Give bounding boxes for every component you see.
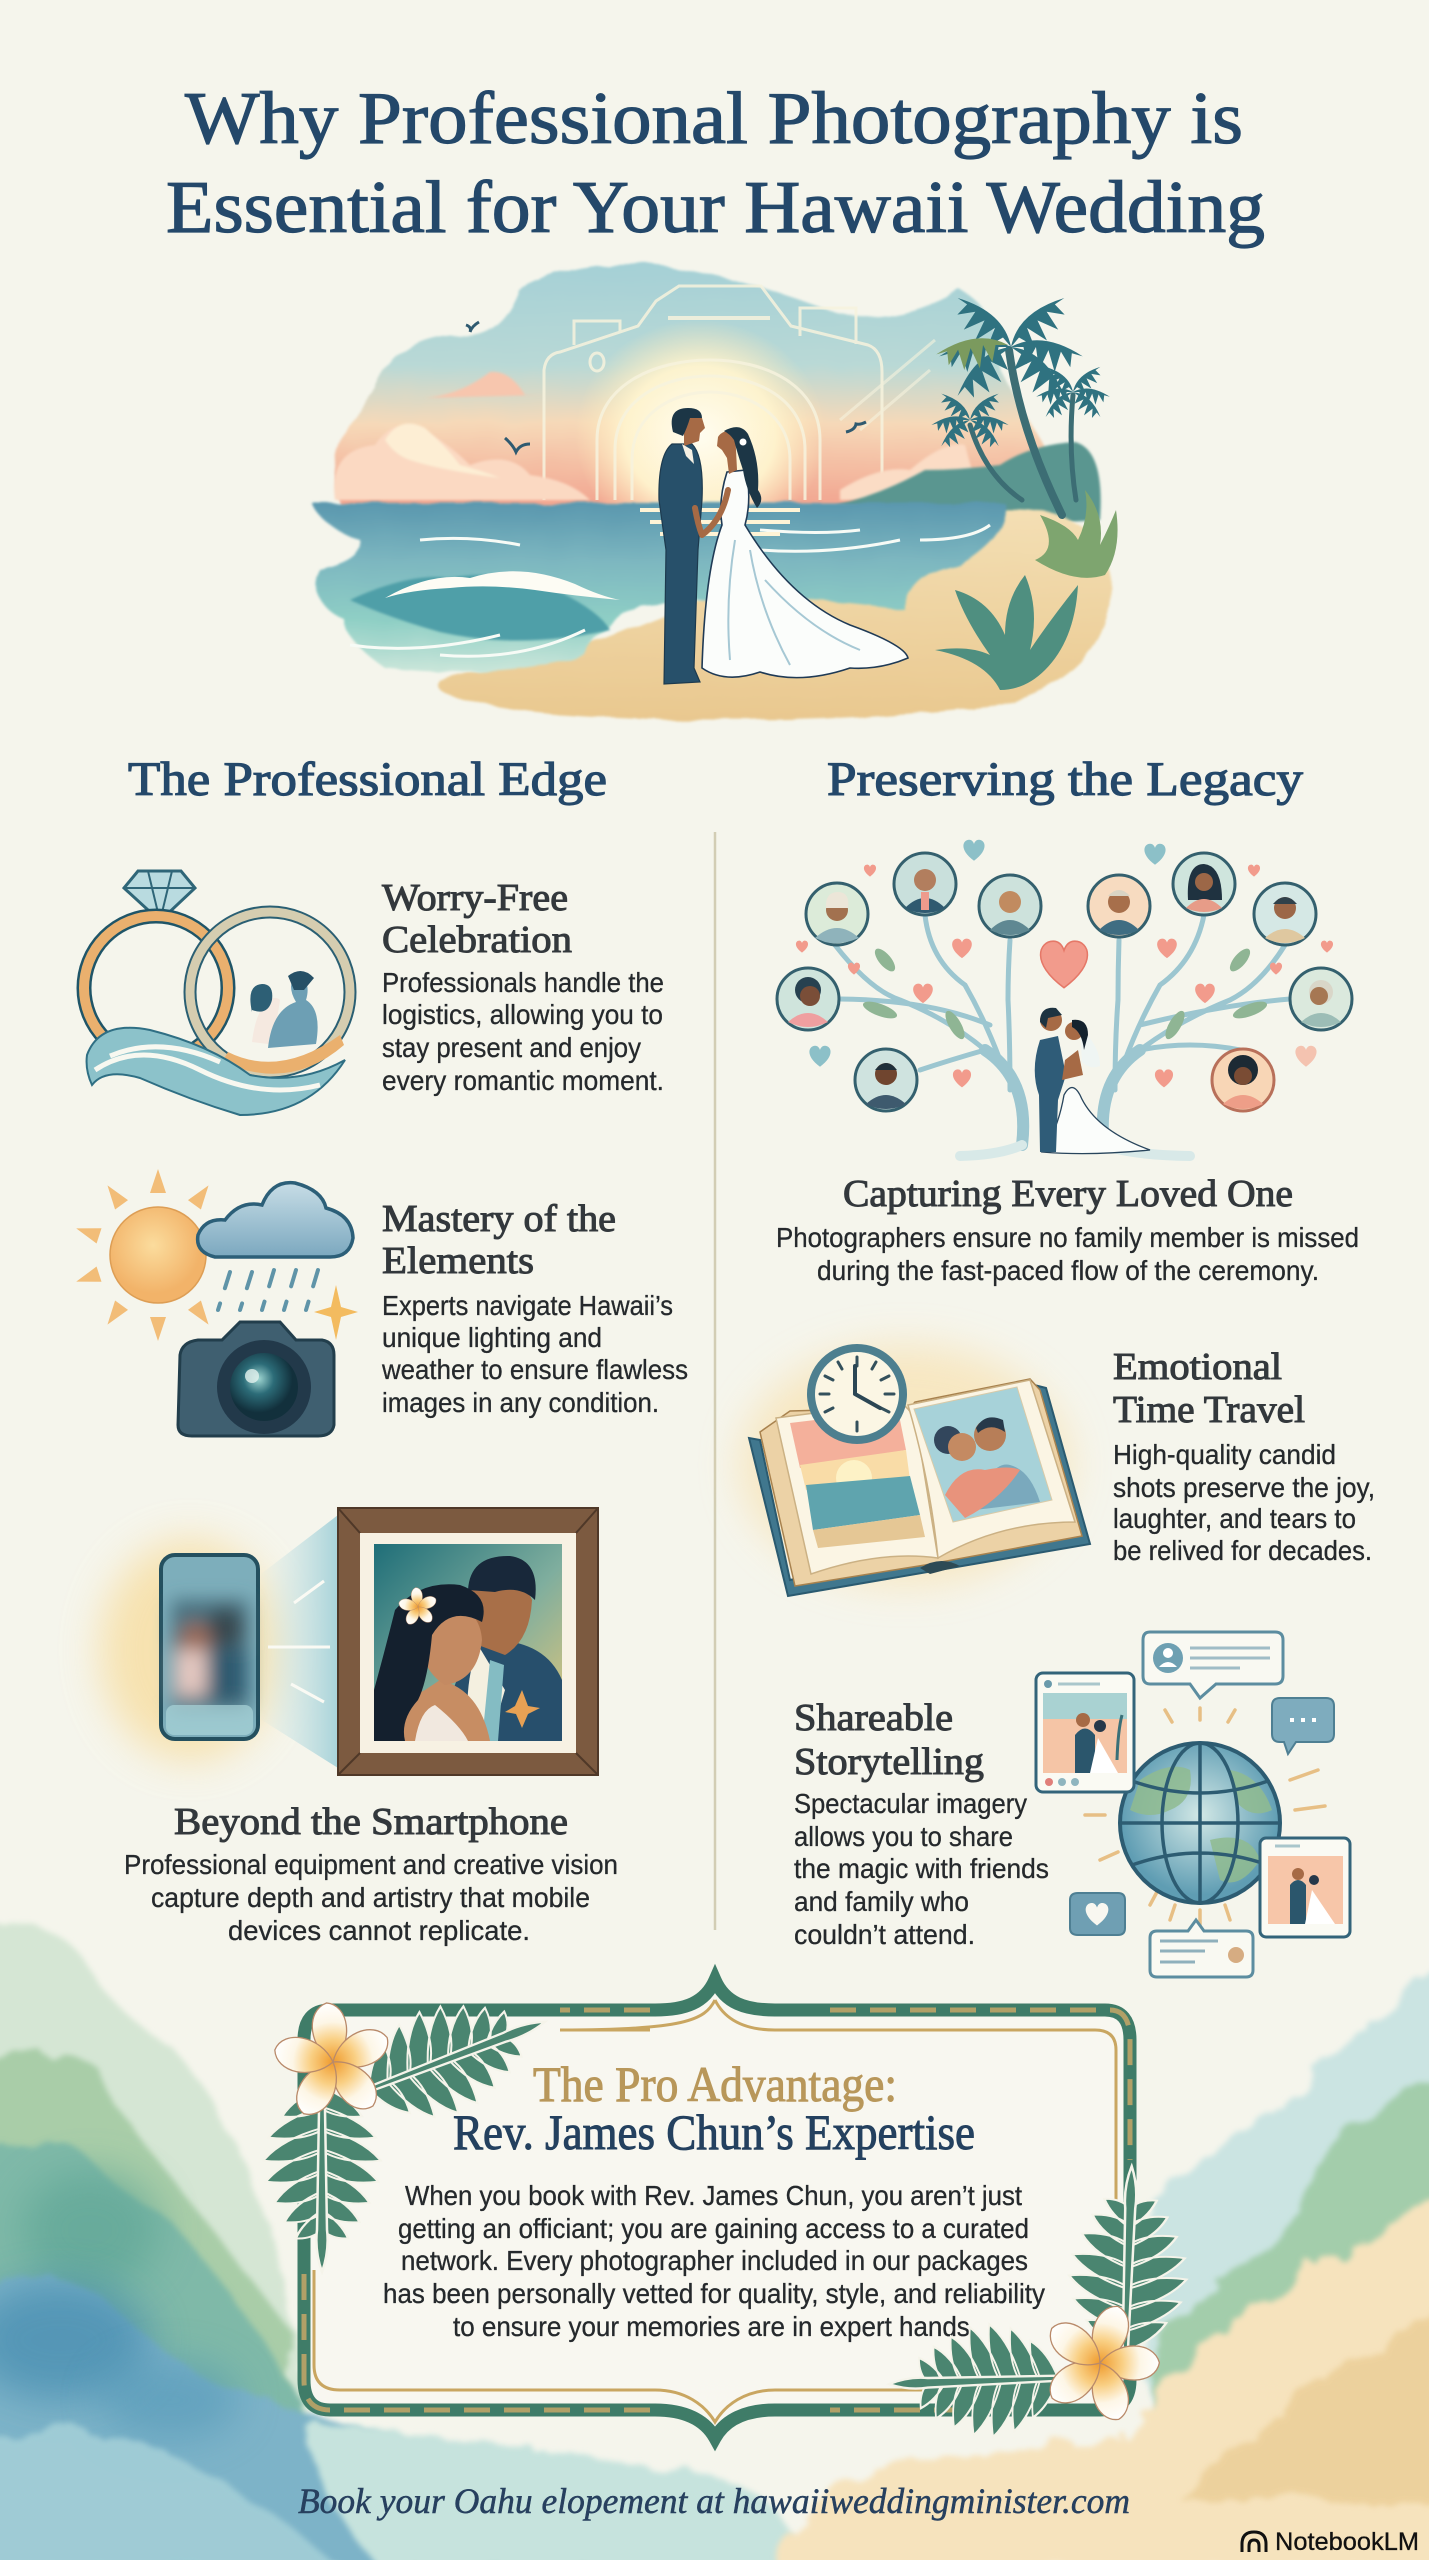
left pale blue wash: [300, 2420, 800, 2560]
heading: Time Travel: [1113, 1389, 1305, 1431]
icon: projection beam: [257, 1515, 338, 1768]
wave: [350, 575, 610, 641]
text block: Photographers ensure no family member is missed: [776, 1222, 1359, 1253]
panel: beyond the smartphone: [100, 1508, 618, 1946]
text block: laughter, and tears to: [1113, 1503, 1356, 1534]
panel: capturing every loved one: [776, 840, 1359, 1286]
birds: [466, 322, 866, 452]
text block: and family who: [794, 1886, 969, 1917]
panel: mastery of the elements: [74, 1169, 688, 1436]
social post: couple: [1036, 1673, 1134, 1792]
icon: family tree with portraits: [777, 840, 1352, 1156]
clouds: [334, 372, 980, 500]
text block: Experts navigate Hawaii’s: [382, 1290, 673, 1321]
bottom post bubble: [1150, 1920, 1253, 1977]
text block: Professional equipment and creative vision: [124, 1849, 618, 1880]
icon: phone glow: [100, 1540, 280, 1760]
palm trees: [931, 288, 1110, 515]
speech bubble: profile: [1143, 1632, 1283, 1698]
text block: the magic with friends: [794, 1853, 1049, 1884]
icon: portrait medallions: [777, 853, 1352, 1111]
text block: devices cannot replicate.: [228, 1915, 530, 1946]
footer call to action: Book your Oahu elopement at hawaiiweddingminister.com: [298, 2481, 1130, 2521]
icon: sun, cloud and camera: [74, 1169, 358, 1436]
notebooklm badge: NotebookLM: [1275, 2528, 1419, 2556]
beach foliage: [935, 490, 1118, 690]
left teal blotch: [20, 2170, 160, 2290]
text block: logistics, allowing you to: [382, 999, 663, 1030]
decorative frame: [304, 1980, 1130, 2438]
heading: Shareable: [794, 1697, 953, 1739]
heading: gold: The Pro Advantage:: [533, 2056, 897, 2112]
heading: [382, 877, 572, 961]
text block: Spectacular imagery: [794, 1788, 1027, 1819]
watercolor landscape background: [0, 1926, 1429, 2560]
heading: Beyond the Smartphone: [174, 1801, 568, 1843]
icon: clock: [811, 1348, 903, 1440]
groom: [659, 408, 705, 684]
icon: palm fronds: [263, 1971, 1190, 2441]
text block: High-quality candid: [1113, 1439, 1336, 1470]
left deep blue blotches: [0, 2280, 150, 2400]
text block: [381, 1290, 688, 1418]
right pale blue hills: [1150, 1970, 1429, 2440]
panel: emotional time travel: [740, 1345, 1375, 1596]
icon: rings and wave: [84, 871, 350, 1115]
callout: the pro advantage: [263, 1971, 1190, 2442]
sand: [438, 510, 1111, 721]
text block: stay present and enjoy: [382, 1032, 641, 1063]
icon: open photo album: [749, 1379, 1090, 1596]
icon: notebooklm mark: [1242, 2532, 1266, 2552]
heading: Mastery of the: [382, 1198, 616, 1240]
left blue water: [0, 2277, 620, 2560]
text block: Professionals handle the: [382, 967, 664, 998]
text block: couldn’t attend.: [794, 1919, 975, 1950]
heading: [1113, 1346, 1305, 1431]
text block: during the fast-paced flow of the ceremony.: [817, 1255, 1319, 1286]
distant island: [835, 442, 1101, 525]
title: Why Professional Photography is: [185, 78, 1243, 160]
center divider: [714, 832, 716, 1930]
text block: unique lighting and: [382, 1322, 602, 1353]
text block: [794, 1788, 1049, 1950]
text block: to ensure your memories are in expert hands.: [453, 2311, 977, 2342]
right section heading: Preserving the Legacy: [827, 753, 1303, 806]
bride: [695, 427, 908, 678]
text block: [124, 1849, 618, 1946]
text block: getting an officiant; you are gaining access to a curated: [398, 2213, 1029, 2244]
sun glow: [575, 320, 825, 550]
text block: weather to ensure flawless: [381, 1354, 688, 1385]
icon: framed portrait: [338, 1508, 598, 1775]
text block: capture depth and artistry that mobile: [151, 1882, 590, 1913]
icon: warm halo: [740, 1345, 1070, 1585]
text block: be relived for decades.: [1113, 1535, 1372, 1566]
text block: [382, 967, 664, 1096]
left section heading: The Professional Edge: [128, 753, 607, 806]
heading: Worry-Free: [382, 877, 568, 919]
heading: navy: Rev. James Chun’s Expertise: [453, 2104, 975, 2160]
text block: [1113, 1439, 1375, 1566]
heading: Celebration: [382, 919, 572, 961]
icon: globe with social posts: [1036, 1632, 1350, 1977]
social post: beach: [1260, 1838, 1350, 1937]
left mid green hills: [0, 2049, 290, 2480]
text block: [776, 1222, 1359, 1286]
heading: [794, 1697, 984, 1783]
sky wash: [335, 264, 1080, 505]
left pale green hills: [0, 1926, 320, 2480]
text block: shots preserve the joy,: [1113, 1472, 1375, 1503]
text block: network. Every photographer included in our packages: [401, 2245, 1028, 2276]
heart bubble: [1070, 1893, 1125, 1935]
icon: smartphone with blurred photo: [161, 1555, 258, 1739]
text block: allows you to share: [794, 1821, 1013, 1852]
chat bubble: [1272, 1698, 1334, 1754]
couple at tree center: [1035, 1008, 1150, 1154]
text block: When you book with Rev. James Chun, you aren’t just: [405, 2180, 1022, 2211]
ocean: [312, 503, 1005, 672]
heading: [382, 1198, 616, 1282]
right green hills: [1150, 2070, 1429, 2440]
heading: Elements: [382, 1240, 534, 1282]
text block: images in any condition.: [382, 1387, 659, 1418]
icon: plumeria flowers: [270, 2003, 1179, 2442]
camera outline: [544, 286, 935, 500]
panel: shareable storytelling: [794, 1632, 1350, 1977]
left teal hills: [0, 2139, 300, 2490]
heading: Emotional: [1113, 1346, 1282, 1388]
text block: every romantic moment.: [382, 1065, 664, 1096]
text block: has been personally vetted for quality, style, and reliability: [383, 2278, 1045, 2309]
title: [166, 78, 1265, 249]
heading: Capturing Every Loved One: [843, 1173, 1293, 1215]
title: Essential for Your Hawaii Wedding: [166, 167, 1265, 249]
right sand dunes: [780, 2200, 1429, 2560]
heading: Storytelling: [794, 1741, 984, 1783]
text block: [383, 2180, 1045, 2342]
hero illustration: couple on beach with camera outline: [312, 264, 1118, 721]
panel: worry-free celebration: [84, 871, 664, 1115]
